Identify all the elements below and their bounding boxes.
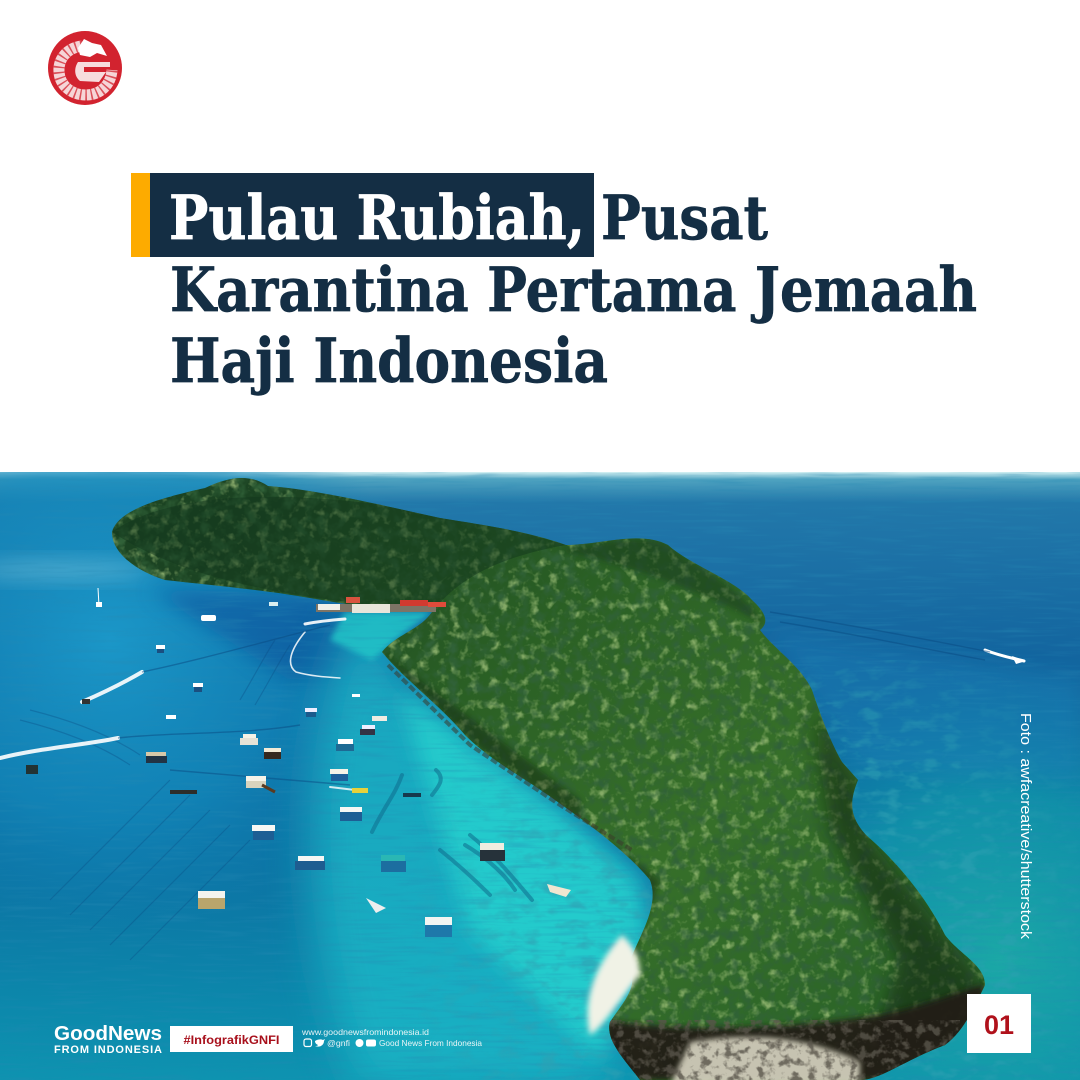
rocky shore (388, 665, 632, 850)
beach (588, 935, 640, 1035)
footer: GoodNews From Indonesia wordmark: FROM INDONESIA (54, 1044, 162, 1056)
footer: website and social links: @gnfi (327, 1038, 350, 1048)
footer: website and social links (301, 1027, 482, 1048)
jetty and resort buildings (316, 597, 446, 613)
title: Karantina Pertama Jemaah (170, 255, 977, 326)
boats (26, 588, 1026, 937)
page number: 01 (984, 1010, 1014, 1040)
icon: twitter (315, 1039, 325, 1047)
footer: hashtag label (170, 1026, 293, 1052)
dragon ring (59, 46, 112, 95)
wave ripples in the bay (20, 640, 290, 960)
page number (967, 994, 1031, 1053)
dragon head (78, 39, 107, 57)
accent bar (131, 173, 150, 257)
photo credit: Foto : awfacreative/shutterstock (1017, 713, 1033, 940)
inner G (75, 62, 110, 82)
icon: instagram (304, 1039, 312, 1046)
icon: youtube (366, 1040, 376, 1046)
icon: facebook (356, 1039, 364, 1047)
footer: website and social links: www.goodnewsfromindonesia.id (301, 1027, 429, 1037)
title: Pusat (601, 183, 768, 254)
footer: GoodNews From Indonesia wordmark (54, 1023, 162, 1056)
sea (0, 472, 1080, 1080)
footer: GoodNews From Indonesia wordmark: GoodNews (54, 1023, 162, 1045)
reef streaks (372, 770, 532, 900)
title: Haji Indonesia (170, 326, 608, 397)
footer: hashtag label: #InfografikGNFI (184, 1033, 280, 1047)
logo (48, 31, 122, 105)
title (169, 183, 977, 397)
footer: website and social links: Good News From Indonesia (379, 1038, 482, 1048)
title: Pulau Rubiah, (169, 183, 585, 254)
boat wakes (0, 619, 1024, 790)
island (100, 470, 1000, 1080)
title highlight (150, 173, 594, 257)
photo: aerial view of Pulau Rubiah (0, 470, 1080, 1080)
